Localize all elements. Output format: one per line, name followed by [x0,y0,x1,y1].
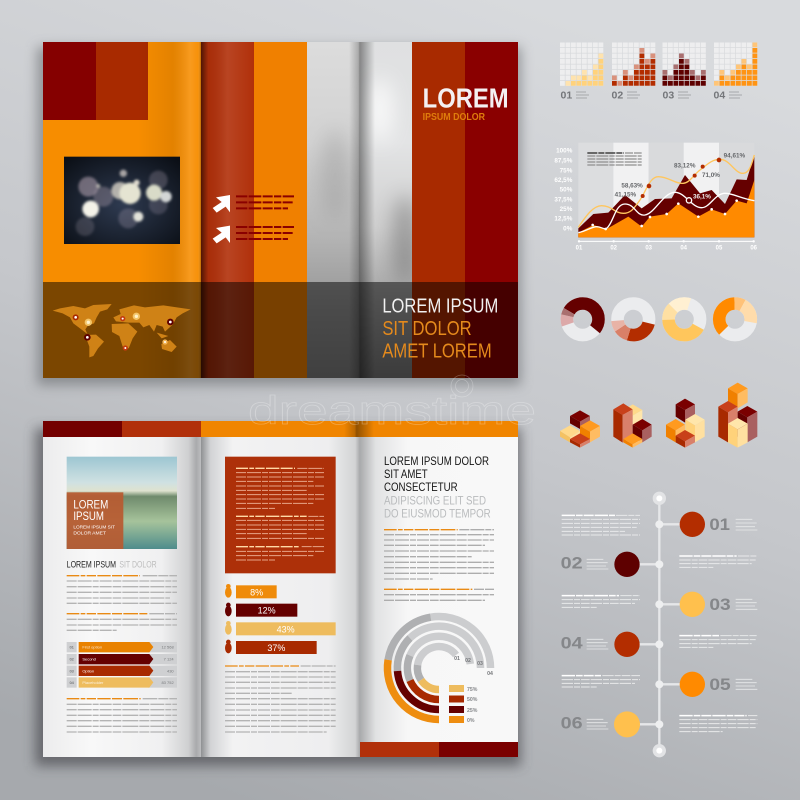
y axis labels: 75% [560,167,573,174]
options table: 03 [69,668,75,673]
data labels: 94,61% [724,152,746,159]
bar: 37 percent: 37% [267,643,285,653]
dark red area [578,155,754,237]
y axis labels: 50% [560,187,573,194]
red text box [225,457,336,573]
top colour bar [43,421,518,437]
photo caption box: IPSUM [73,509,104,523]
lower cover text: SIT DOLOR [382,318,472,340]
right stripes [412,42,465,378]
step 04 [561,632,757,657]
right page [384,455,494,600]
chart: radial arcs [387,617,490,720]
y axis labels: 0% [563,225,573,232]
step 02: 02 [561,554,583,573]
options table: 83 752 [161,680,174,685]
donut 4 [719,304,751,335]
chart labels [454,656,493,677]
panel: top brochure cover [37,42,521,385]
chart labels: 03 [477,661,483,667]
photo caption box: LOREM IPSUM SIT [73,524,115,530]
cover content in crop coordinates [53,82,509,363]
data labels: 83,12% [674,162,696,169]
world map with markers [53,304,191,357]
grid chart 01 [560,42,604,86]
options table: 430 [167,668,174,673]
bar: 43 percent: 43% [277,624,295,634]
chart legend: 75% [467,687,478,693]
right page heading: SIT AMET [384,468,428,481]
bar: 12 percent [236,604,297,617]
options table: 02 [69,657,75,662]
watermark [248,375,536,433]
red and orange stripes [201,42,254,378]
options table: First option [82,645,102,650]
grid labels: 03 [662,90,674,102]
blocks 1 [560,410,600,448]
bar: 37 percent [236,641,317,654]
blocks 3 [666,399,705,448]
blocks 2 [613,403,652,448]
white area markers [591,199,738,230]
bar: 8 percent [236,585,277,598]
chart legend [449,685,478,724]
panel: area line chart [554,143,758,252]
step 06 [561,711,757,737]
step 03: 03 [709,595,731,614]
photo caption box: DOLOR AMET [73,530,106,536]
grid labels: 04 [714,90,725,102]
chart labels: 02 [465,658,471,664]
right page text [384,530,494,600]
icon: person yellow [225,621,232,635]
grid chart 04 [714,42,758,86]
photo caption box [67,492,123,549]
lower cover text [382,296,498,363]
step 02 [561,552,757,577]
x axis [576,240,758,252]
x axis: 05 [716,246,723,252]
plot background stripes [578,143,754,237]
panel: square grid charts [560,42,758,102]
y axis labels: 100% [556,147,573,154]
step 05: 05 [709,675,731,694]
right page heading: DO EIUSMOD TEMPOR [384,507,491,520]
y axis labels: 25% [560,206,573,213]
panel: bottom brochure inside [35,421,521,766]
silver stripes [307,42,360,378]
data labels: 58,63% [621,182,643,189]
data labels: 36,1% [693,194,711,201]
options table: Option [82,668,94,673]
icon: person dark red [225,603,232,616]
step 05 [562,672,757,697]
donut 1 [567,304,598,335]
photo caption box: LOREM [73,498,108,512]
options table: Placeholder [82,680,104,685]
right page heading: CONSECTETUR [384,481,458,494]
chart labels: 04 [487,671,493,677]
panel: vertical timeline [561,492,757,757]
x axis: 01 [576,246,583,252]
data labels [615,152,746,201]
bottom colour bar [360,742,518,757]
orange area [578,180,754,237]
left page [67,457,177,732]
donut 2 [618,304,649,335]
text lines beside arrow two [236,227,294,239]
data labels: 71,0% [702,172,720,179]
data points [641,158,721,203]
right page heading: LOREM IPSUM DOLOR [384,455,489,468]
options table [67,642,177,688]
step 01 [562,512,757,537]
bar: 12 percent: 12% [258,606,276,616]
icon: arrow two [213,226,230,243]
x axis: 04 [680,246,688,252]
right page heading [384,455,491,520]
white trend line [578,192,754,233]
dark lower band [43,282,518,378]
options table: Second [82,657,96,662]
data labels: 41,15% [615,192,637,199]
options table: 01 [69,645,75,650]
x axis: 02 [610,246,618,252]
left page heading: LOREM IPSUM [67,559,116,569]
grid labels: 01 [560,90,572,102]
yellow trend line [578,155,754,227]
y axis labels: 62,5% [554,177,573,184]
left page heading: SIT DOLOR [119,559,157,569]
watermark: dreamstime [248,389,536,433]
page backgrounds [43,421,201,757]
y axis labels [554,147,573,232]
step 06: 06 [561,714,583,733]
chart note text [587,153,642,165]
x axis: 03 [645,246,653,252]
cover title: LOREM [423,82,509,113]
grid chart 03 [662,42,706,86]
bar: 8 percent: 8% [250,587,263,597]
options table: 7 124 [164,657,174,662]
lower cover text: AMET LOREM [382,341,492,363]
grid chart 02 [612,42,656,86]
grid captions [576,92,742,98]
timeline spine [639,492,680,757]
text lines beside arrow one [236,196,294,208]
cover subtitle: IPSUM DOLOR [423,112,485,123]
options table: 04 [69,680,75,685]
centre page [225,457,336,732]
x axis: 06 [750,246,758,252]
bar: 43 percent [236,622,336,635]
chart labels: 01 [454,656,460,662]
y axis labels: 37,5% [554,196,573,203]
icon: arrow one [213,195,230,213]
y axis labels: 12,5% [554,216,573,223]
y axis labels: 87,5% [554,157,573,164]
step 03 [562,592,757,617]
icon: person orange [225,584,232,598]
lower cover text: LOREM IPSUM [382,296,498,318]
photo: blurred landscape [67,457,177,549]
grid labels [560,90,725,102]
text block one [67,576,177,732]
right page heading: ADIPISCING ELIT SED [384,494,486,507]
panel: isometric block charts [560,383,757,448]
step 04: 04 [561,634,584,653]
grid labels: 02 [612,90,623,102]
left cover page [43,42,201,378]
donut 3 [668,304,700,335]
options table: 12 568 [161,645,174,650]
chart legend: 0% [467,718,475,724]
blocks 4 [718,383,757,448]
panel: donut charts [567,304,751,335]
chart legend: 25% [467,708,478,714]
step 01: 01 [709,515,730,534]
text block under bars [225,666,336,732]
chart legend: 50% [467,697,478,703]
photo: night bokeh [64,157,180,244]
icon: person red [225,640,232,653]
